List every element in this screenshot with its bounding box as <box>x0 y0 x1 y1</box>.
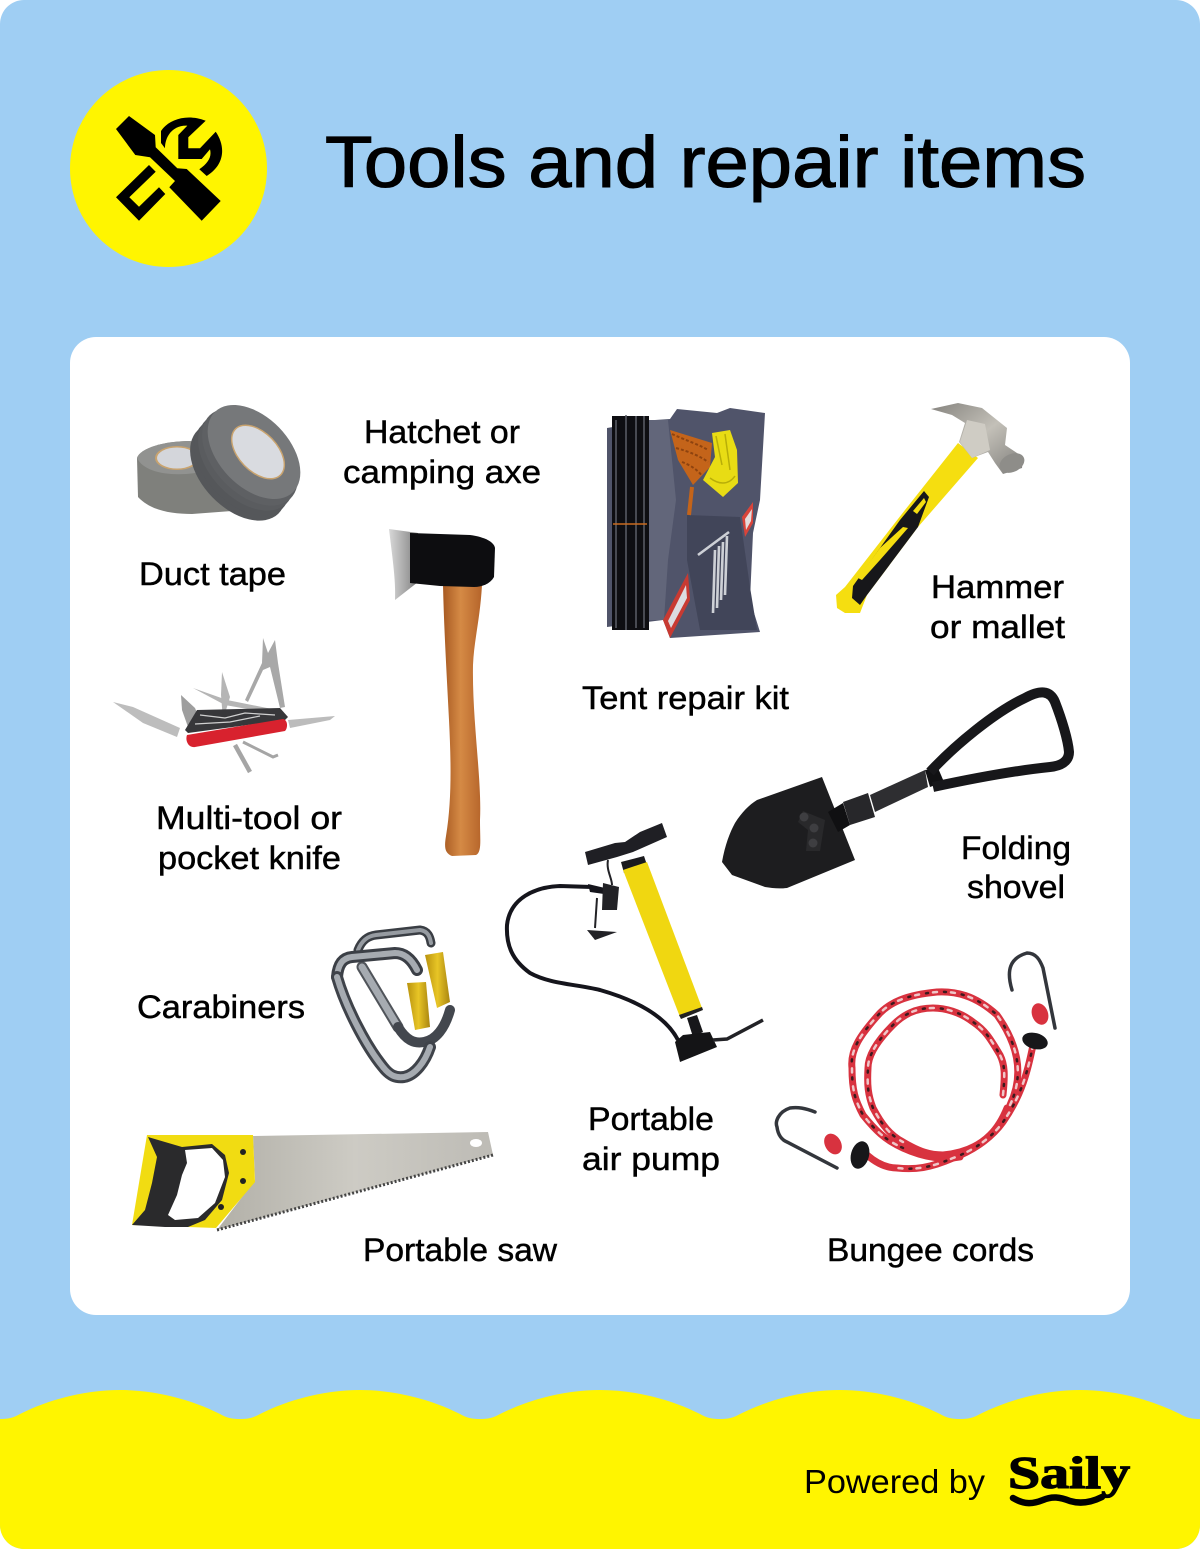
label: folding shovel: shovel <box>967 869 1065 905</box>
label: air pump <box>582 1101 720 1177</box>
label: hatchet: camping axe <box>343 454 541 490</box>
icon: folding shovel <box>722 692 1069 888</box>
footer text: powered by: Powered by <box>804 1463 986 1500</box>
icon: multi-tool <box>113 638 335 772</box>
label: carabiners: Carabiners <box>137 989 305 1025</box>
label: folding shovel: Folding <box>961 830 1071 866</box>
icon: bungee cords <box>776 953 1055 1171</box>
label: multi-tool: Multi-tool or <box>156 800 342 836</box>
icon: hammer <box>836 403 1028 613</box>
label: hatchet <box>343 414 541 490</box>
icon: duct tape <box>137 387 318 539</box>
label: air pump: Portable <box>588 1101 714 1137</box>
icon: air pump <box>507 823 763 1062</box>
label: folding shovel <box>961 830 1071 905</box>
footer wave band <box>0 1390 1200 1549</box>
label: multi-tool <box>156 800 342 876</box>
logo: Saily: Saily <box>1008 1447 1130 1498</box>
label: tent repair kit: Tent repair kit <box>582 680 789 716</box>
label: hammer <box>930 569 1065 645</box>
label: hatchet: Hatchet or <box>364 414 520 450</box>
label: bungee cords: Bungee cords <box>827 1232 1034 1268</box>
panel: items <box>70 337 1130 1315</box>
icon: hatchet <box>389 529 495 856</box>
label: portable saw: Portable saw <box>363 1232 558 1268</box>
icon: tools badge <box>70 70 267 267</box>
label: hammer: Hammer <box>931 569 1064 605</box>
label: hammer: or mallet <box>930 609 1065 645</box>
title: Tools and repair items <box>325 123 1086 203</box>
label: multi-tool: pocket knife <box>158 840 341 876</box>
icon: carabiners <box>337 930 450 1077</box>
icon: portable saw <box>132 1132 493 1230</box>
label: air pump: air pump <box>582 1141 720 1177</box>
icon: tent repair kit <box>607 408 765 638</box>
label: duct tape: Duct tape <box>139 556 286 592</box>
